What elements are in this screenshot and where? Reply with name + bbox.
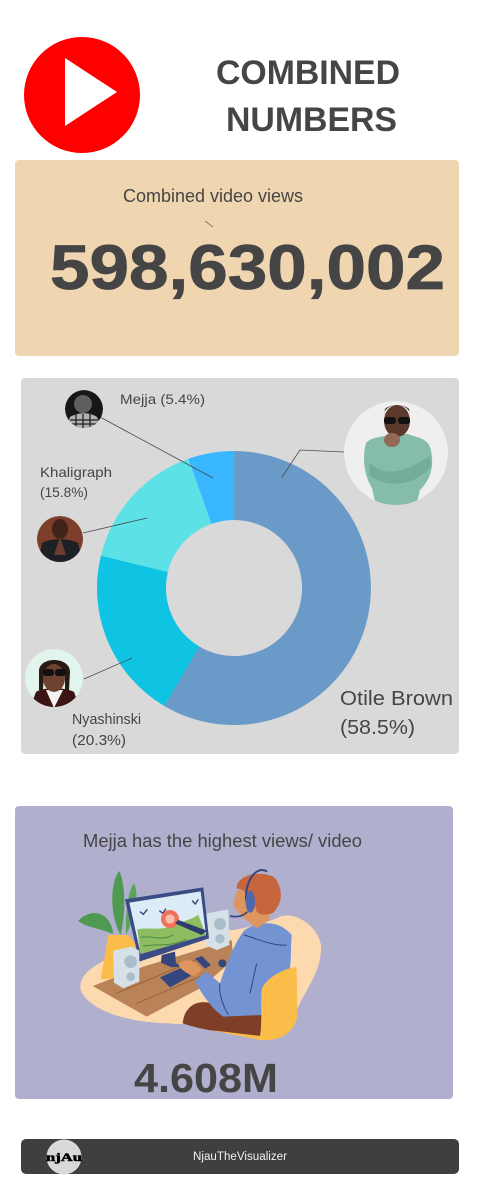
donut chart: [97, 451, 371, 725]
hoodie: [195, 923, 292, 1017]
panel: combined video views: [15, 160, 459, 356]
speakers: [205, 909, 229, 950]
monitor: [161, 952, 185, 967]
label: combined video views: Combined video views: [123, 186, 303, 206]
illustration: person gaming at a desk: [78, 870, 321, 1040]
label: Khaligraph: (15.8%): [40, 484, 88, 500]
hand: [178, 960, 202, 976]
headset: [246, 870, 267, 901]
title: COMBINED: [216, 54, 400, 92]
panel: donut chart: [21, 378, 459, 754]
big number: views per video: 4.608M: [134, 1055, 278, 1101]
legs: [183, 1002, 262, 1036]
plant: [112, 871, 124, 935]
label: Khaligraph: [40, 464, 112, 500]
heading: highest views per video: Mejja has the highest views/ video: [83, 831, 362, 851]
panel: highest views per video: [15, 806, 453, 1101]
portrait: Nyashinski: [25, 649, 83, 708]
chair: [210, 967, 297, 1040]
icon: Njau logo: njAu: [46, 1150, 82, 1164]
title: NUMBERS: [226, 101, 397, 139]
leader lines: [83, 417, 344, 679]
portrait: Khaligraph: [37, 516, 83, 562]
footer credit: NjauTheVisualizer: [193, 1151, 287, 1163]
keyboard and mouse: [160, 967, 191, 987]
icon: YouTube play logo: [24, 37, 140, 153]
big number: total views: 598,630,002: [50, 233, 445, 303]
label: Nyashinski: Nyashinski: [72, 712, 141, 728]
desk: [93, 940, 233, 1017]
neck and face: [233, 890, 269, 928]
label: Otile Brown: Otile Brown: [340, 688, 453, 710]
label: Otile Brown: [340, 688, 453, 739]
footer bar: [21, 1139, 459, 1174]
label: Khaligraph: Khaligraph: [40, 464, 112, 480]
icon: Njau logo: [46, 1140, 82, 1174]
portrait: Otile Brown: [344, 401, 448, 506]
portrait: Mejja: [65, 390, 103, 428]
label: Nyashinski: [72, 712, 141, 749]
hair: [237, 874, 281, 915]
title: [216, 54, 400, 139]
label: Mejja: Mejja (5.4%): [120, 391, 205, 407]
label: Nyashinski: (20.3%): [72, 733, 126, 749]
label: Otile Brown: (58.5%): [340, 717, 415, 739]
front speaker: [113, 947, 139, 988]
